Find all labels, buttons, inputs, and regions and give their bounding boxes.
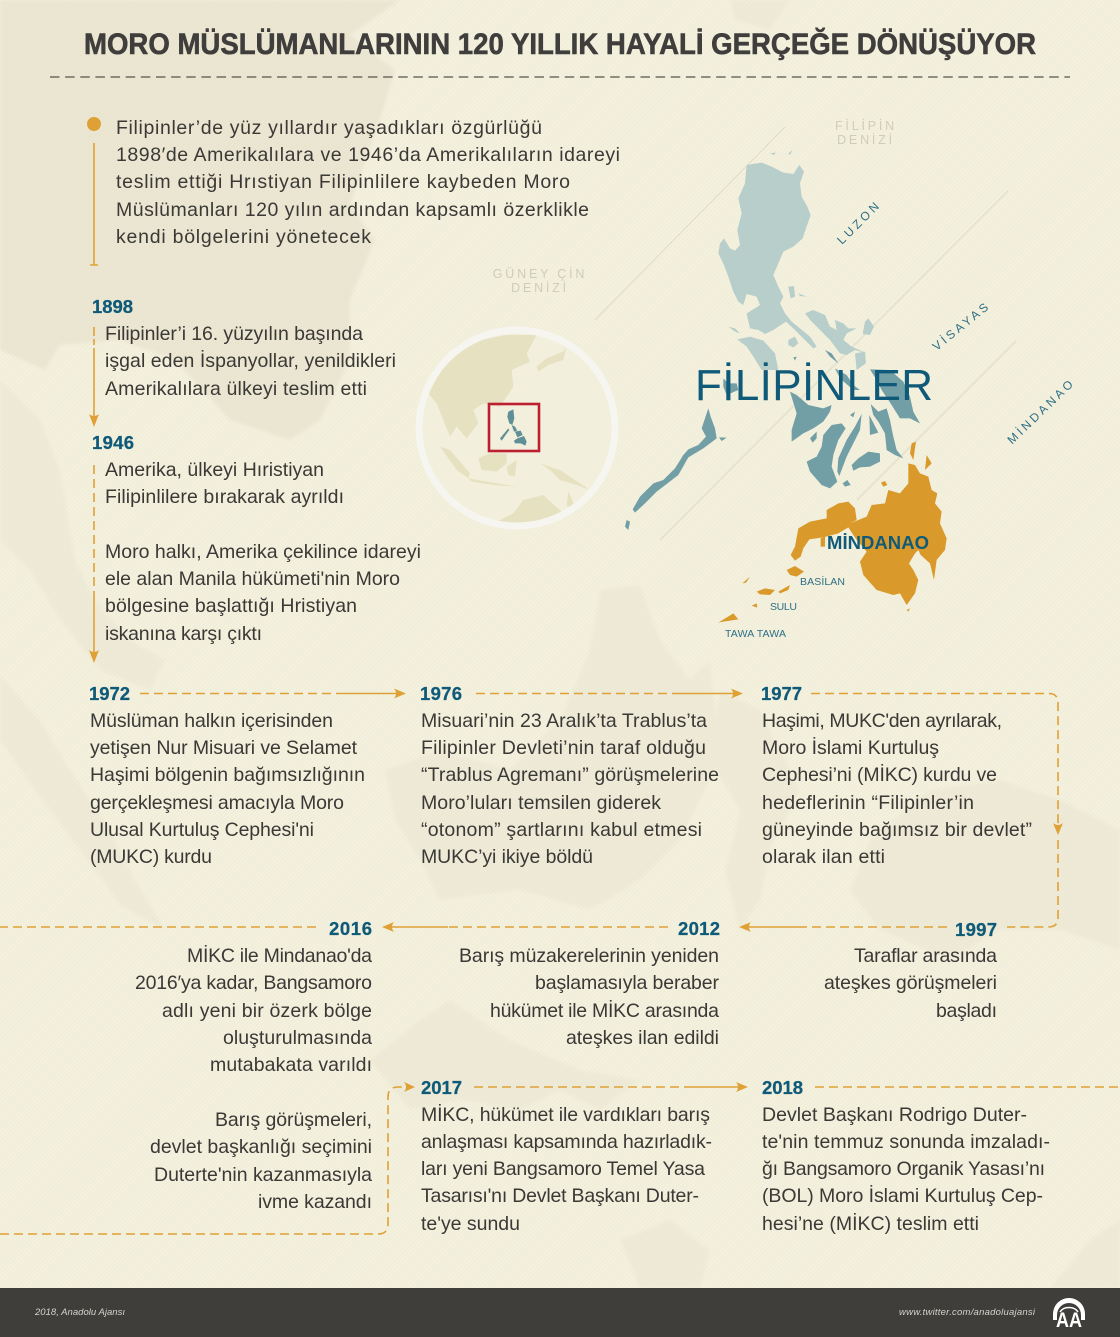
locator globe (419, 330, 615, 527)
map: Philippines (625, 150, 947, 623)
event 1997: başladı (936, 1000, 997, 1022)
intro text: Filipinler’de yüz yıllardır yaşadıkları özgürlüğü (116, 117, 542, 139)
intro text: 1898′de Amerikalılara ve 1946’da Amerikalıların idareyi (116, 144, 620, 166)
event 1997 (824, 919, 997, 1022)
event 1972: yetişen Nur Misuari ve Selamet (90, 737, 358, 759)
footer (0, 1288, 1120, 1337)
event 1977: 1977 (761, 683, 802, 704)
label: Filipinler: FİLİPİNLER (695, 361, 933, 410)
event 1976: 1976 (420, 683, 462, 704)
event 2012: ateşkes ilan edildi (566, 1027, 719, 1049)
event 1946: Amerika, ülkeyi Hıristiyan (105, 459, 324, 481)
arrow 1946 to 1972 (89, 465, 99, 663)
icon: AA logo (1053, 1298, 1085, 1332)
event 1946: ele alan Manila hükümeti'nin Moro (105, 568, 400, 590)
intro text: teslim ettiği Hrıstiyan Filipinlilere kaybeden Moro (116, 171, 570, 193)
event 1972: Müslüman halkın içerisinden (90, 710, 333, 732)
event 2017: te'ye sundu (421, 1213, 520, 1235)
event 2016: 2016′ya kadar, Bangsamoro (135, 972, 372, 994)
intro text: kendi bölgelerini yönetecek (116, 226, 371, 248)
arrow 2017 to 2018 (474, 1082, 748, 1092)
event 1977: güneyinde bağımsız bir devlet” (762, 819, 1032, 841)
label: Sulu: SULU (770, 601, 797, 613)
event 1946: 1946 (92, 432, 134, 453)
arrow 1898 to 1946 (89, 327, 99, 427)
event 2012: hükümet ile MİKC arasında (490, 999, 719, 1022)
arrow 1977 to 1997 (811, 694, 1063, 927)
map region: Visayas and Palawan (625, 350, 920, 530)
event 2016 (135, 918, 372, 1213)
event 2016: oluşturulmasında (223, 1027, 372, 1049)
event 1946 (92, 432, 421, 645)
event 2016: Duterte'nin kazanmasıyla (154, 1164, 372, 1186)
event 2018: 2018 (762, 1077, 803, 1098)
event 1972: (MUKC) kurdu (90, 846, 212, 868)
intro marker (87, 117, 101, 265)
event 2012 (459, 918, 720, 1049)
event 2018: te'nin temmuz sonunda imzaladı- (762, 1131, 1050, 1153)
event 1976: Moro’luları temsilen giderek (421, 792, 661, 814)
event 1977: hedeflerinin “Filipinler’in (762, 792, 974, 814)
event 2017 (421, 1077, 712, 1235)
event 2012: Barış müzakerelerinin yeniden (459, 945, 719, 967)
event 1977: Cephesi’ni (MİKC) kurdu ve (762, 763, 997, 786)
event 2016: MİKC ile Mindanao'da (187, 944, 372, 967)
line from 2016 going off page (0, 926, 316, 928)
event 1977: Moro İslami Kurtuluş (762, 736, 939, 759)
label: Güney Çin Denizi: GÜNEY ÇİN (493, 267, 587, 281)
event 2018: (BOL) Moro İslami Kurtuluş Cep- (762, 1184, 1043, 1207)
event 2016: Barış görüşmeleri, (215, 1109, 372, 1131)
map region: Luzon (718, 150, 874, 370)
label: Mindanao region: MİNDANAO (1004, 375, 1078, 447)
event 1976: Misuari’nin 23 Aralık’ta Trablus’ta (421, 710, 707, 732)
label: Mindanao: MİNDANAO (827, 532, 929, 553)
event 1976: MUKC’yi ikiye böldü (421, 846, 593, 868)
footer link: www.twitter.com/anadoluajansi (899, 1307, 1036, 1318)
event 1976: Filipinler Devleti’nin taraf olduğu (421, 737, 706, 759)
event 2018: hesi’ne (MİKC) teslim etti (762, 1212, 979, 1235)
label: Visayas: VİSAYAS (930, 298, 993, 354)
event 2018: ğı Bangsamoro Organik Yasası’nı (762, 1158, 1045, 1180)
event 1976 (420, 683, 719, 868)
footer credit: 2018, Anadolu Ajansı (34, 1307, 125, 1318)
label: Güney Çin Denizi (493, 267, 587, 295)
event 1976: “otonom” şartlarını kabul etmesi (421, 819, 702, 841)
event 2016: adlı yeni bir özerk bölge (162, 1000, 372, 1022)
event 1997: 1997 (955, 919, 997, 940)
locator Philippines mini map (500, 409, 527, 446)
event 2017: MİKC, hükümet ile vardıkları barış (421, 1103, 710, 1126)
background map guide lines (595, 127, 1016, 540)
event 1898 (92, 296, 396, 400)
map region: Mindanao (718, 442, 947, 623)
event 1976: “Trablus Agremanı” görüşmelerine (421, 764, 719, 786)
event 2012: başlamasıyla beraber (535, 972, 720, 994)
event 2016: devlet başkanlığı seçimini (150, 1136, 372, 1158)
event 2017: anlaşması kapsamında hazırladık- (421, 1131, 712, 1153)
event 1972: gerçekleşmesi amacıyla Moro (90, 792, 344, 814)
event 1972 (89, 683, 365, 868)
event 1977: Haşimi, MUKC'den ayrılarak, (762, 710, 1002, 732)
event 1946: iskanına karşı çıktı (105, 623, 262, 645)
arrow 1972 to 1976 (140, 688, 406, 698)
event 2016: mutabakata varıldı (210, 1054, 372, 1076)
event 1946: bölgesine başlattığı Hristiyan (105, 595, 357, 617)
label: Güney Çin Denizi: DENİZİ (511, 281, 569, 295)
event 2012: 2012 (678, 918, 720, 939)
event 1898: Filipinler’i 16. yüzyılın başında (105, 323, 363, 345)
event 1977: olarak ilan etti (762, 846, 885, 868)
event 1972: 1972 (89, 683, 130, 704)
event 2017: Tasarısı'nı Devlet Başkanı Duter- (421, 1185, 699, 1207)
intro text (116, 117, 620, 248)
event 2017: ları yeni Bangsamoro Temel Yasa (421, 1158, 705, 1180)
arrow 1976 to 1977 (476, 688, 743, 698)
event 1898: işgal eden İspanyollar, yenildikleri (105, 349, 396, 372)
event 1997: ateşkes görüşmeleri (824, 972, 997, 994)
label: Filipin Denizi: DENİZİ (837, 133, 895, 147)
arrow 1997 to 2012 (739, 922, 947, 932)
event 1977 (761, 683, 1032, 868)
locator box (489, 404, 539, 451)
event 1972: Ulusal Kurtuluş Cephesi'ni (90, 819, 314, 841)
event 2016: 2016 (329, 918, 372, 939)
event 2017: 2017 (421, 1077, 462, 1098)
label: Luzon: LUZON (834, 197, 884, 247)
label: Basilan: BASİLAN (800, 575, 845, 588)
event 2018: Devlet Başkanı Rodrigo Duter- (762, 1104, 1027, 1126)
title: MORO MÜSLÜMANLARININ 120 YILLIK HAYALİ GERÇEĞE DÖNÜŞÜYOR (84, 27, 1036, 61)
label: Filipin Denizi (835, 119, 897, 147)
event 1946: Filipinlilere bırakarak ayrıldı (105, 486, 344, 508)
event 2016: ivme kazandı (258, 1191, 372, 1213)
event 1898: 1898 (92, 296, 133, 317)
icon: AA logo: AA (1056, 1309, 1082, 1332)
event 1946: Moro halkı, Amerika çekilince idareyi (105, 541, 421, 563)
event 1997: Taraflar arasında (854, 945, 997, 967)
event 1972: Haşimi bölgenin bağımsızlığının (90, 764, 365, 786)
label: Tawa Tawa: TAWA TAWA (725, 628, 786, 640)
event 2018 (762, 1077, 1050, 1235)
line from 2018 going off page (815, 1086, 1120, 1088)
label: Filipin Denizi: FİLİPİN (835, 119, 897, 133)
arrow around to 2017 (0, 1082, 415, 1234)
event 1898: Amerikalılara ülkeyi teslim etti (105, 378, 367, 400)
arrow 2012 to 2016 (382, 922, 668, 932)
intro text: Müslümanları 120 yılın ardından kapsamlı özerklikle (116, 199, 589, 221)
